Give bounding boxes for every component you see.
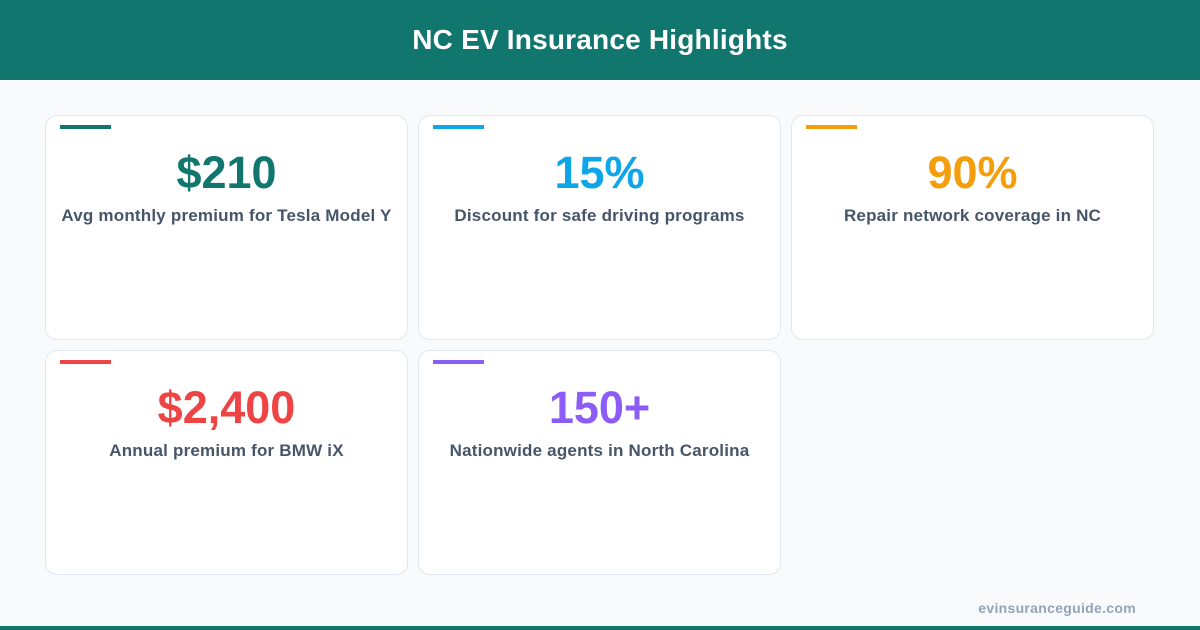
panel: tesla premium: [45, 115, 408, 340]
panel: BMW annual premium: [45, 350, 408, 575]
footer source: evinsuranceguide.com: [978, 600, 1136, 616]
panel: repair network: [791, 115, 1154, 340]
panel: repair network: 90%: [927, 147, 1018, 198]
panel: safe driving discount: 15%: [554, 147, 645, 198]
panel: safe driving discount: [418, 115, 781, 340]
panel: nationwide agents: 150+: [549, 382, 650, 433]
title: NC EV Insurance Highlights: [412, 24, 788, 55]
title: [0, 0, 1200, 80]
panel: tesla premium: $210: [176, 147, 277, 198]
panel: nationwide agents: Nationwide agents in North Carolina: [450, 441, 749, 460]
panel: tesla premium: Avg monthly premium for Tesla Model Y: [61, 206, 392, 225]
panel: BMW annual premium: Annual premium for BMW iX: [109, 441, 344, 460]
panel: safe driving discount: Discount for safe driving programs: [454, 206, 745, 225]
panel: nationwide agents: [418, 350, 781, 575]
panel: repair network: Repair network coverage in NC: [844, 206, 1101, 225]
panel: BMW annual premium: $2,400: [158, 382, 295, 433]
